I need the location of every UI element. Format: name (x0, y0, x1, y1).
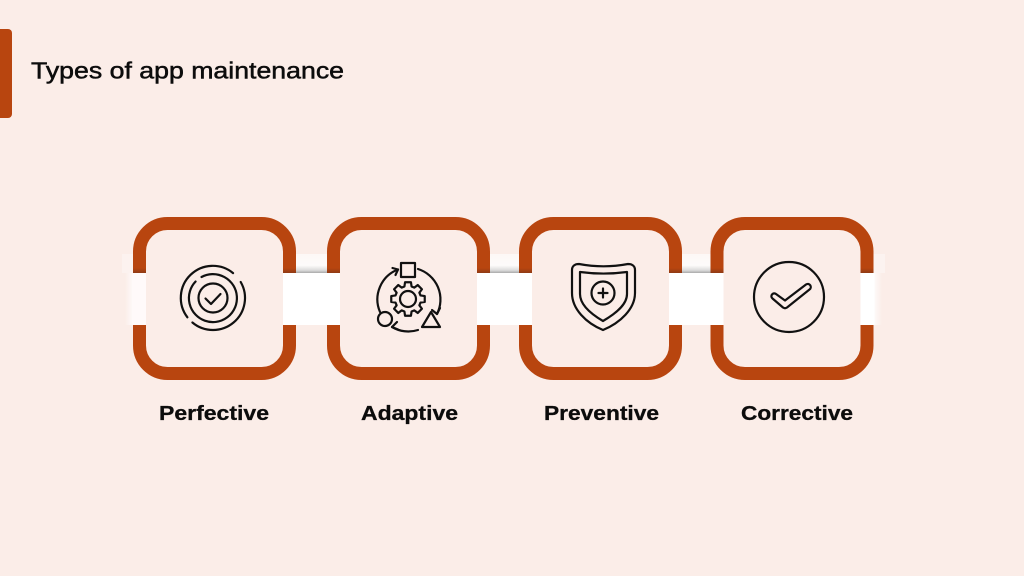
panel: Preventive (518, 224, 682, 425)
panel: Perfective (132, 224, 297, 425)
icon: circled check (754, 262, 824, 332)
title: Types of app maintenance (31, 58, 344, 84)
icon: shield with plus (572, 264, 635, 330)
frame (132, 224, 297, 374)
frame (326, 224, 490, 374)
frame (518, 224, 682, 374)
panel: Adaptive (326, 224, 490, 425)
connecting white band (122, 254, 885, 325)
label: Corrective (741, 403, 853, 425)
panel: Corrective (710, 224, 874, 425)
frame (710, 224, 874, 374)
label: Preventive (544, 403, 659, 425)
label: Adaptive (361, 403, 458, 425)
title accent bar (0, 29, 12, 118)
label: Perfective (159, 403, 269, 425)
icon: target with check (181, 266, 245, 330)
icon: gear with cycle of shapes (377, 263, 440, 331)
